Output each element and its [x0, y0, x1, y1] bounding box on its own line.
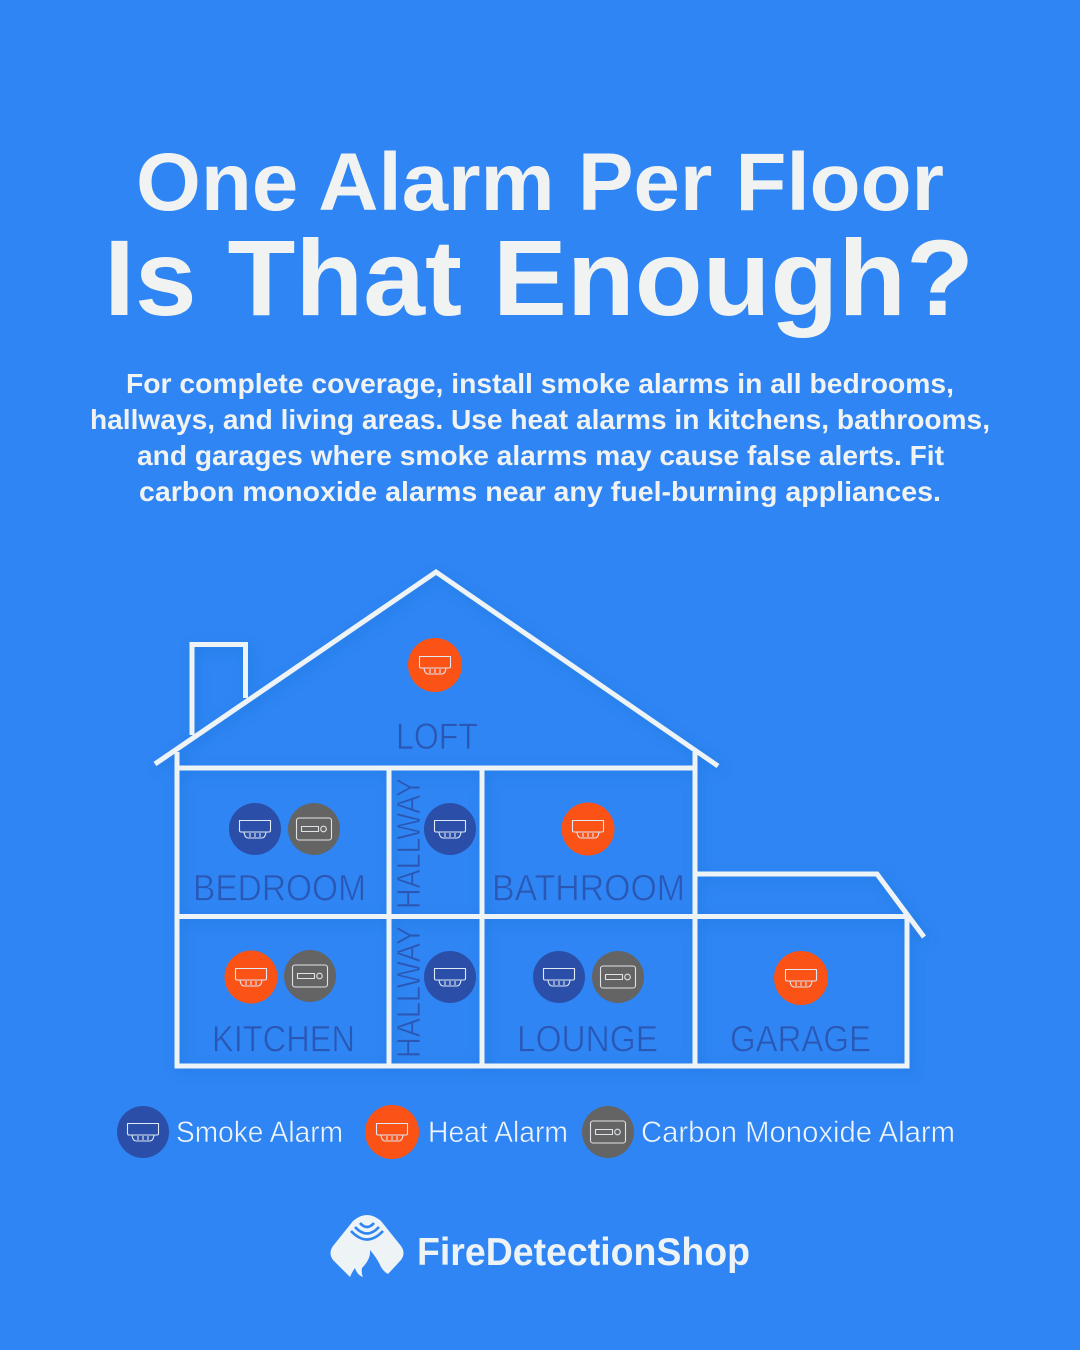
legend: smoke alarm — [117, 1106, 343, 1158]
icon: lounge smoke alarm — [533, 951, 585, 1003]
icon: bathroom heat alarm — [562, 802, 614, 856]
title: Is That Enough? — [104, 217, 974, 338]
icon: bedroom smoke alarm — [229, 803, 281, 855]
icon: bedroom carbon monoxide alarm — [288, 803, 340, 855]
room label: bedroom: BEDROOM — [193, 868, 366, 908]
icon: kitchen heat alarm — [224, 950, 278, 1004]
room label: garage: GARAGE — [730, 1018, 871, 1060]
icon: garage heat alarm — [774, 951, 828, 1005]
legend: smoke alarm: Smoke Alarm — [176, 1116, 343, 1149]
intro text block: For complete coverage, install smoke alarms in all bedrooms, — [126, 368, 954, 399]
house floor plan — [155, 572, 924, 1066]
icon: loft heat alarm — [408, 638, 462, 692]
room label: lower hallway: HALLWAY — [390, 926, 427, 1058]
intro text block: carbon monoxide alarms near any fuel-burning appliances. — [139, 476, 941, 507]
icon: kitchen carbon monoxide alarm — [284, 950, 336, 1002]
room label: lounge: LOUNGE — [517, 1018, 658, 1060]
legend: carbon monoxide alarm: Carbon Monoxide Alarm — [641, 1116, 955, 1149]
logo: FireDetectionShop — [330, 1215, 750, 1277]
intro text block: and garages where smoke alarms may cause false alerts. Fit — [137, 440, 944, 471]
title — [104, 137, 974, 338]
house outline and walls — [155, 572, 924, 1066]
legend: carbon monoxide alarm — [582, 1106, 955, 1158]
legend — [117, 1105, 955, 1159]
intro text block: hallways, and living areas. Use heat alarms in kitchens, bathrooms, — [90, 404, 990, 435]
icon: upper hallway smoke alarm — [424, 803, 476, 855]
icon: lounge carbon monoxide alarm — [592, 951, 644, 1003]
legend: heat alarm: Heat Alarm — [428, 1116, 568, 1149]
room label: upper hallway: HALLWAY — [390, 778, 427, 909]
icon: lower hallway smoke alarm — [424, 951, 476, 1003]
wordmark: FireDetectionShop — [417, 1231, 750, 1274]
icon: flame and signal diamond — [330, 1215, 404, 1277]
room label: bathroom: BATHROOM — [492, 868, 685, 908]
room label: loft: LOFT — [396, 716, 478, 757]
legend: heat alarm — [365, 1105, 568, 1159]
intro text block — [90, 368, 990, 507]
room label: kitchen: KITCHEN — [212, 1018, 355, 1060]
title: One Alarm Per Floor — [136, 137, 944, 228]
